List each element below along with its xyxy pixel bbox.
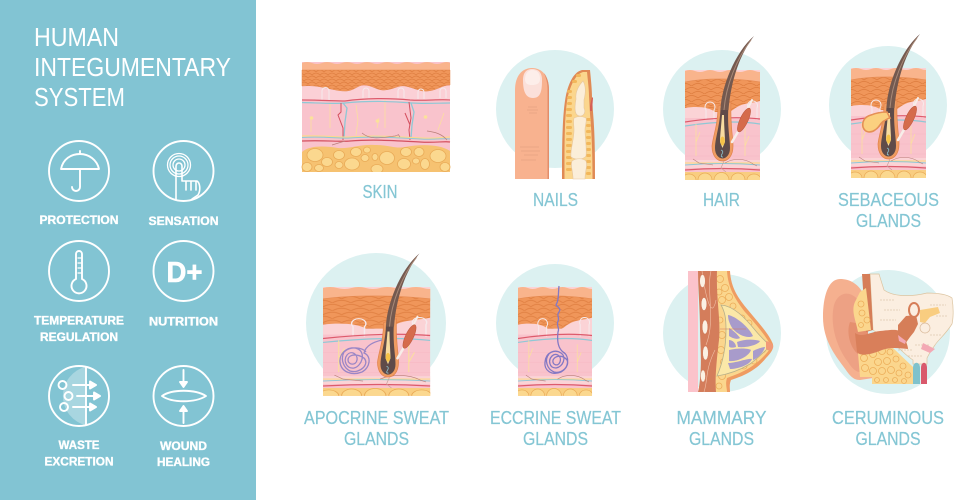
illustration: hair bbox=[663, 36, 781, 180]
temporal tissue bbox=[870, 274, 953, 364]
illustration: apocrine sweat glands bbox=[306, 253, 446, 396]
sebaceous gland bbox=[863, 112, 890, 132]
label: wound healing: HEALING bbox=[157, 455, 210, 469]
icon: sensation touch bbox=[154, 141, 214, 201]
illustration: eccrine sweat glands bbox=[496, 264, 614, 396]
label: sebaceous glands: GLANDS bbox=[856, 211, 921, 231]
label: waste excretion: WASTE bbox=[58, 438, 100, 452]
title: INTEGUMENTARY bbox=[34, 52, 231, 82]
label: waste excretion: EXCRETION bbox=[44, 454, 114, 468]
illustration: mammary glands bbox=[663, 271, 781, 392]
title bbox=[34, 22, 231, 112]
label: wound healing: WOUND bbox=[160, 439, 207, 453]
coiled gland bbox=[340, 340, 382, 374]
finger exterior bbox=[515, 68, 549, 179]
title: HUMAN bbox=[34, 22, 119, 52]
label: apocrine sweat glands bbox=[304, 408, 449, 449]
outer ear bbox=[823, 279, 873, 380]
label: mammary glands: GLANDS bbox=[689, 429, 754, 449]
label: temperature regulation: TEMPERATURE bbox=[34, 314, 124, 328]
icon: wound healing bbox=[154, 366, 214, 426]
icon: waste excretion bbox=[49, 366, 109, 426]
left panel bbox=[0, 0, 256, 500]
label: wound healing bbox=[157, 439, 210, 469]
icon: nutrition D+ bbox=[154, 241, 214, 301]
coiled gland and duct bbox=[545, 286, 568, 373]
ear canal bbox=[855, 330, 908, 355]
label: ceruminous glands: GLANDS bbox=[856, 429, 920, 449]
label: skin: SKIN bbox=[362, 182, 398, 202]
label: eccrine sweat glands: GLANDS bbox=[523, 429, 588, 449]
label: sebaceous glands: SEBACEOUS bbox=[838, 190, 939, 210]
label: mammary glands: MAMMARY bbox=[676, 408, 766, 428]
icon: protection umbrella bbox=[49, 141, 109, 201]
label: mammary glands bbox=[676, 408, 766, 449]
label: eccrine sweat glands bbox=[490, 408, 621, 449]
label: apocrine sweat glands: APOCRINE SWEAT bbox=[304, 408, 449, 428]
cartilage strip and fat bbox=[862, 274, 873, 332]
icon: nutrition D+: D+ bbox=[166, 257, 202, 289]
illustration: skin cross-section bbox=[302, 62, 450, 178]
inner ear bbox=[898, 315, 918, 344]
illustration: ceruminous glands bbox=[823, 270, 953, 394]
icon: temperature thermometer bbox=[49, 241, 109, 301]
label: eccrine sweat glands: ECCRINE SWEAT bbox=[490, 408, 621, 428]
label: ceruminous glands bbox=[832, 408, 944, 449]
label: protection: PROTECTION bbox=[40, 213, 118, 227]
title: SYSTEM bbox=[34, 82, 125, 112]
illustration: sebaceous glands bbox=[829, 34, 947, 178]
blood vessels bbox=[913, 363, 920, 384]
label: temperature regulation: REGULATION bbox=[40, 330, 118, 344]
illustration: nails bbox=[496, 50, 614, 179]
label: temperature regulation bbox=[34, 314, 124, 344]
label: nails: NAILS bbox=[533, 190, 578, 210]
label: nutrition: NUTRITION bbox=[149, 314, 218, 328]
finger section bbox=[562, 70, 595, 179]
label: waste excretion bbox=[44, 438, 114, 468]
label: sebaceous glands bbox=[838, 190, 939, 231]
label: sensation: SENSATION bbox=[148, 214, 218, 228]
label: ceruminous glands: CERUMINOUS bbox=[832, 408, 944, 428]
label: hair: HAIR bbox=[703, 190, 740, 210]
label: apocrine sweat glands: GLANDS bbox=[344, 429, 409, 449]
